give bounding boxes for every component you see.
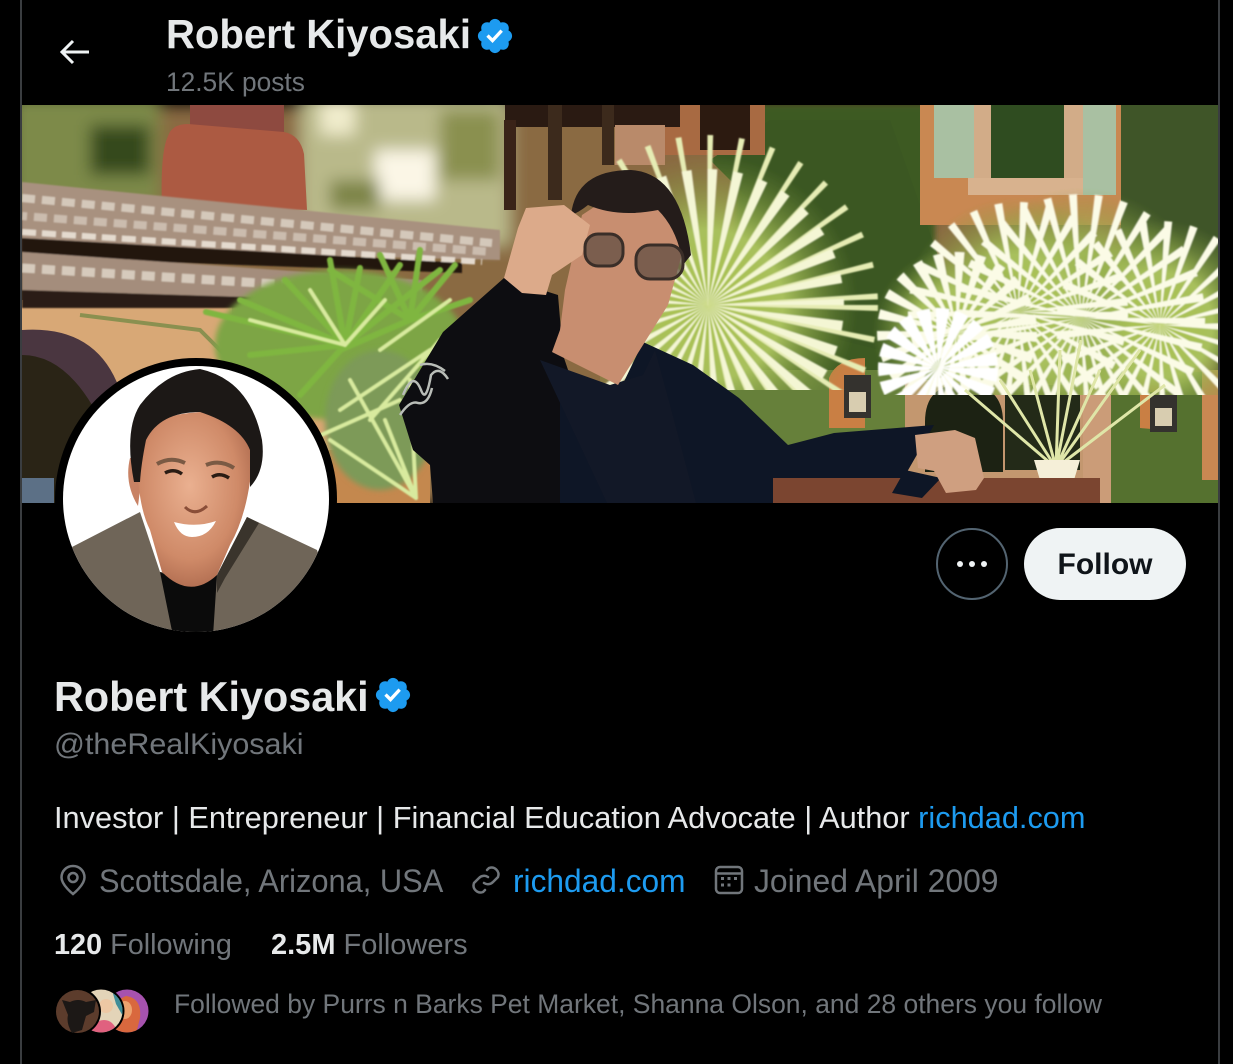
wall and arch — [22, 300, 430, 503]
tiled roof — [22, 182, 500, 308]
icon: back arrow — [60, 40, 89, 64]
ivy wall — [710, 105, 1218, 503]
profile name: Robert Kiyosaki — [54, 673, 369, 720]
location: Scottsdale, Arizona, USA — [99, 863, 443, 899]
right shoulder shadow — [217, 517, 259, 593]
lanterns — [829, 358, 1177, 432]
window upper right — [920, 105, 1121, 225]
mouth — [174, 521, 216, 537]
man: jacket right and arm — [560, 342, 941, 503]
sleeve embroidery — [400, 364, 448, 415]
follow button — [1024, 528, 1186, 600]
bio: Investor | Entrepreneur | Financial Education Advocate | Author richdad.com — [54, 800, 1085, 835]
lower right arched window — [905, 365, 1218, 503]
followed by text: Followed by Purrs n Barks Pet Market, Shanna Olson, and 28 others you follow — [174, 989, 1102, 1019]
profile avatar — [55, 358, 337, 632]
building upper centre — [504, 105, 765, 210]
icon: link — [472, 866, 500, 894]
more button — [936, 528, 1008, 600]
icon: location pin — [60, 864, 86, 896]
followers count: 2.5M Followers — [271, 929, 468, 961]
nose — [185, 506, 207, 512]
brows and eyes — [157, 460, 234, 468]
first avatar: dog — [54, 988, 101, 1035]
man: hair — [571, 170, 691, 265]
man: resting hand — [915, 430, 984, 493]
icon: verified badge — [376, 678, 410, 712]
join date: Joined April 2009 — [754, 863, 999, 899]
header post count: 12.5K posts — [166, 67, 305, 97]
banner background trees and sky — [10, 95, 1218, 510]
man: raised hand — [504, 205, 590, 295]
palm left — [206, 250, 470, 498]
man: sleeve and jacket left — [399, 278, 613, 503]
jacket — [72, 512, 318, 632]
following count: 120 Following — [54, 929, 232, 961]
shirt — [160, 572, 217, 636]
icon: calendar — [714, 866, 744, 894]
palm centre — [600, 134, 879, 390]
chimney — [162, 105, 307, 210]
header title: Robert Kiyosaki — [166, 11, 471, 57]
bench — [773, 478, 1100, 503]
hair — [130, 369, 263, 487]
man: jacket sleeve over bench — [892, 470, 941, 498]
man: glasses — [585, 234, 683, 279]
handle: @theRealKiyosaki — [54, 728, 304, 761]
ear — [128, 458, 140, 506]
follow button: Follow — [1058, 548, 1152, 581]
website link: richdad.com — [513, 863, 686, 899]
second avatar — [90, 990, 124, 1032]
icon: verified badge header — [478, 18, 512, 54]
palm trunks right — [965, 340, 1165, 480]
man: t-shirt — [540, 350, 696, 503]
man: neck and face — [552, 190, 683, 385]
banner photo — [22, 105, 1218, 503]
third avatar — [116, 990, 148, 1032]
palm cluster right — [876, 194, 1218, 395]
follower avatars — [56, 990, 148, 1033]
face and neck — [138, 412, 253, 587]
